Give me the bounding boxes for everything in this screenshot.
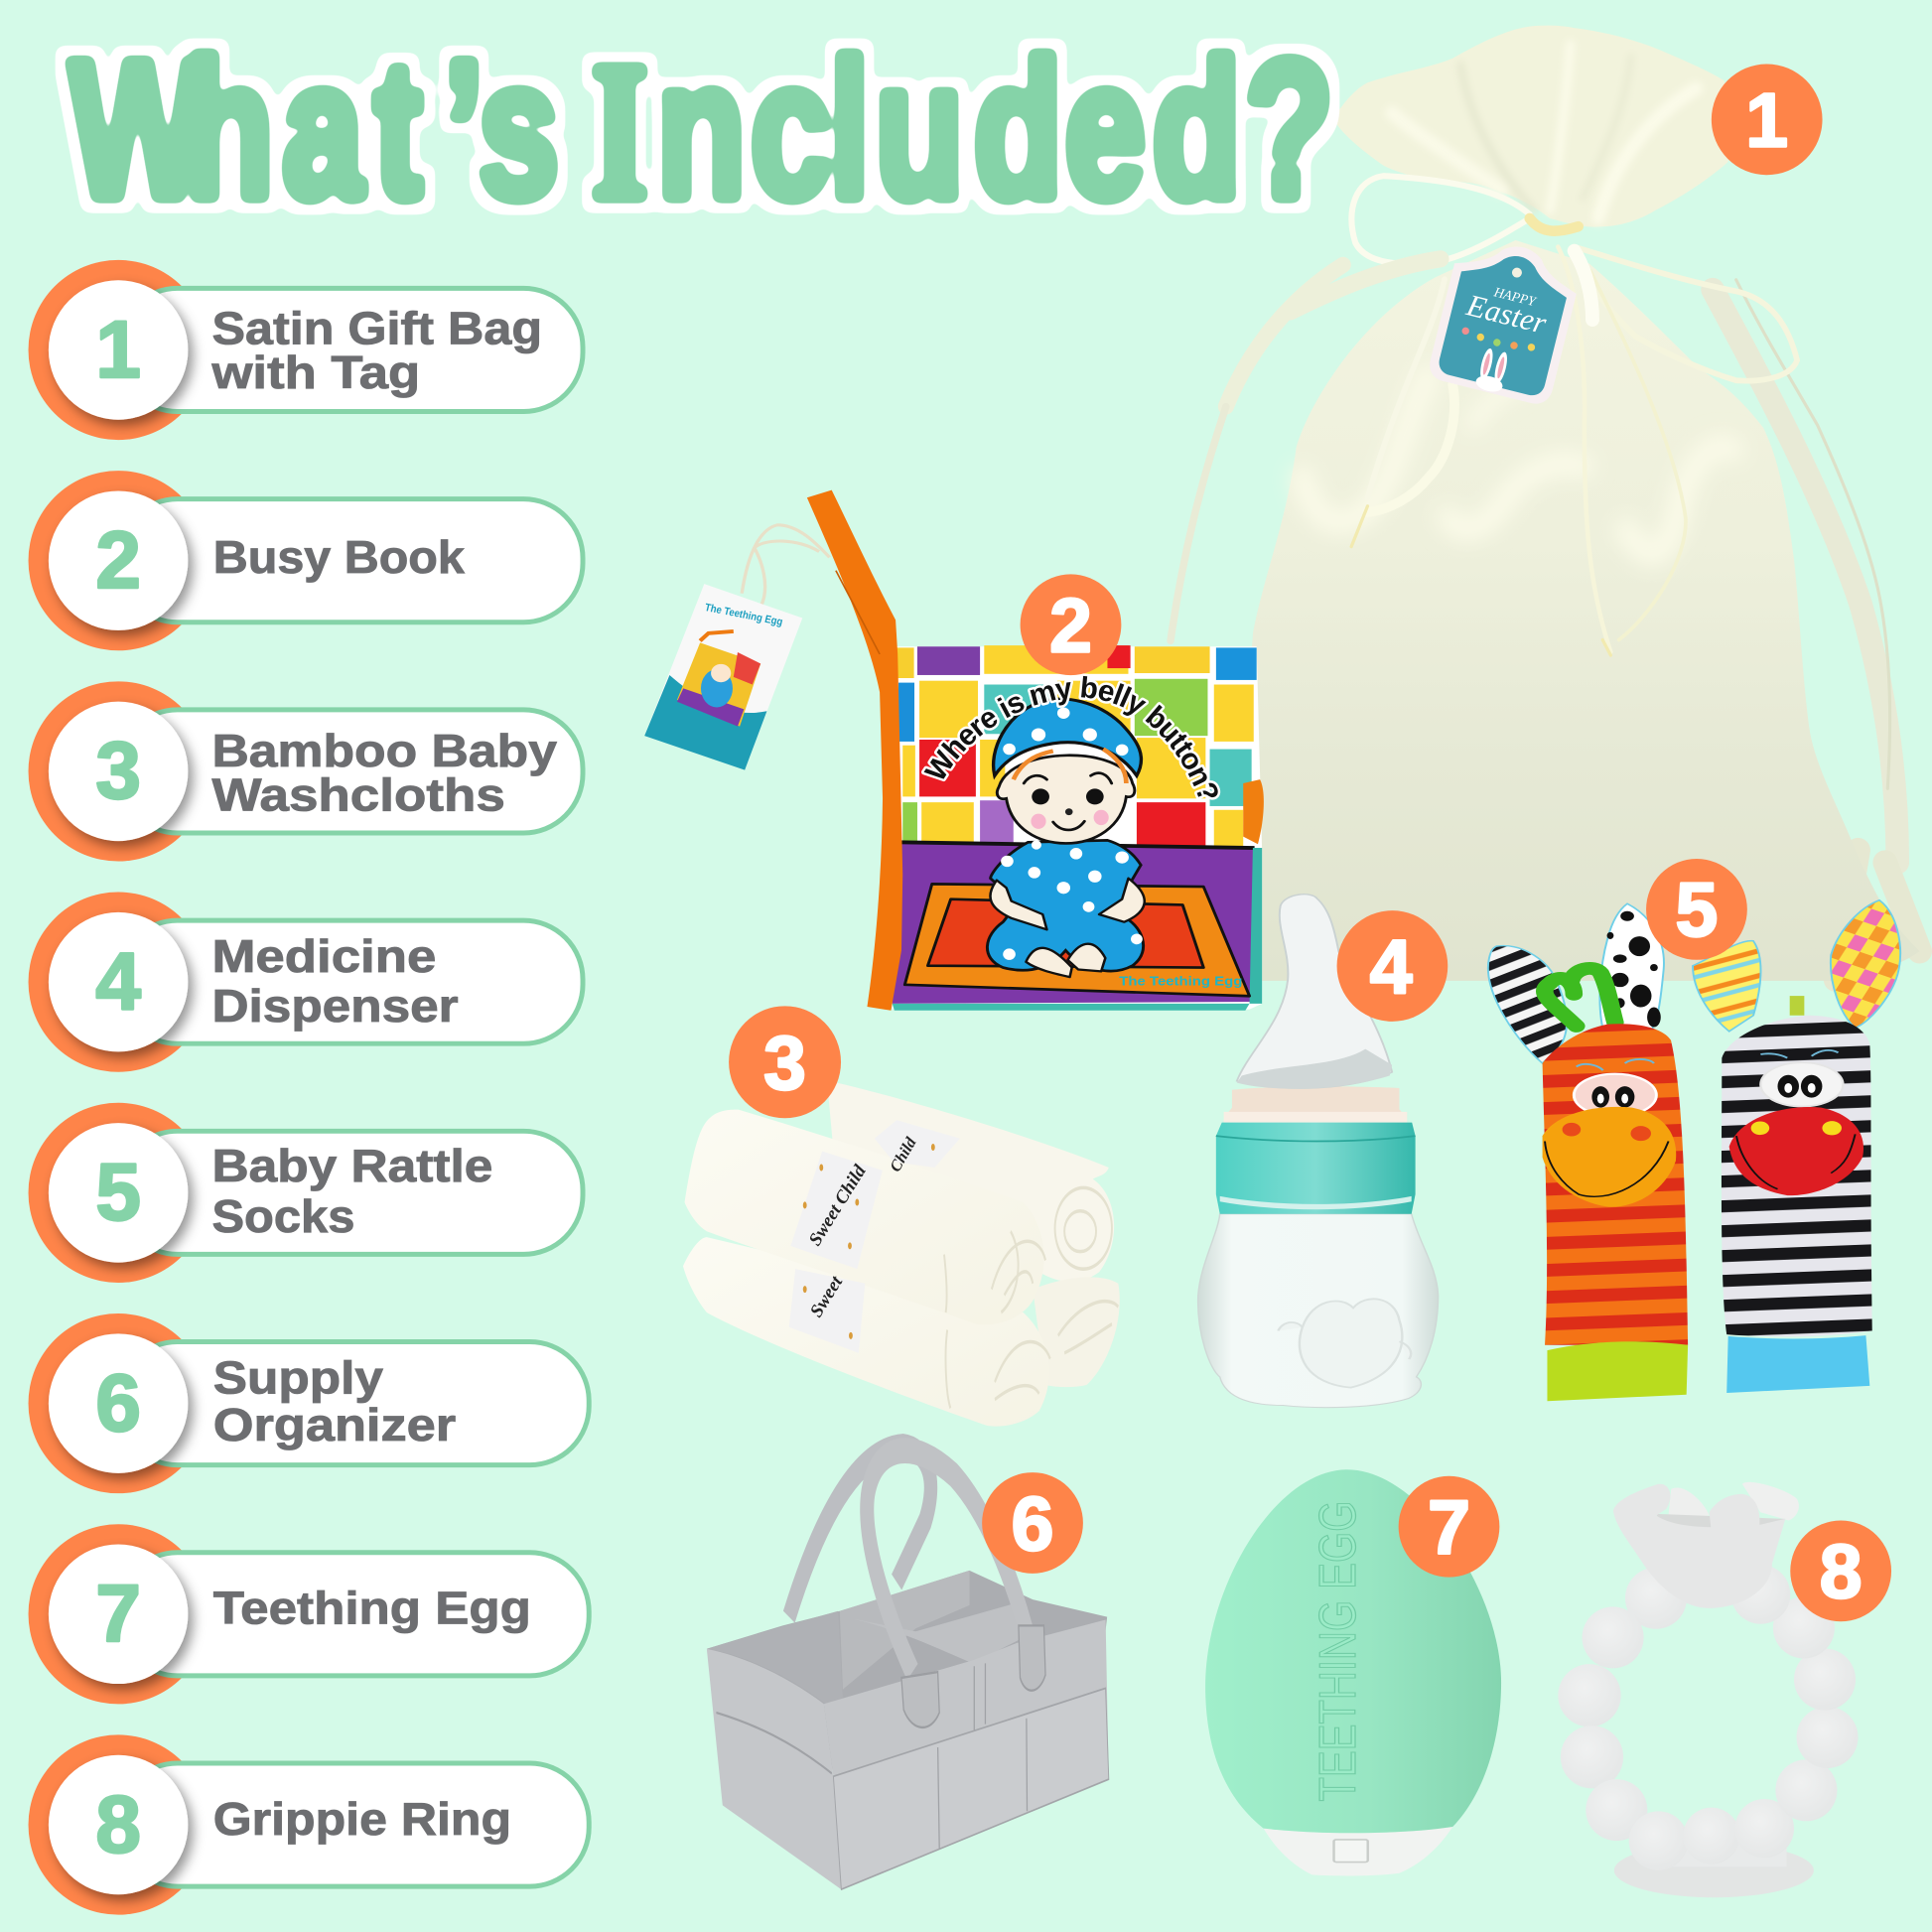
bag satin highlights	[1303, 376, 1732, 554]
number badge 1: 1	[1745, 78, 1788, 164]
book spine tab	[1243, 779, 1264, 844]
number badge 5	[1646, 859, 1747, 960]
list item 7	[29, 1524, 589, 1704]
list item 1: Satin Gift Bag	[211, 302, 542, 353]
front handle	[867, 1450, 1027, 1672]
list item 7: Teething Egg	[213, 1583, 531, 1634]
title: I	[592, 21, 648, 240]
number badge 4	[1337, 910, 1448, 1022]
list item 6: Organizer	[213, 1399, 456, 1450]
number badge 8: 8	[1820, 1530, 1863, 1615]
band label upper: Sweet Child	[805, 1161, 871, 1250]
number badge 7: 7	[1428, 1485, 1470, 1571]
gift tag	[1427, 232, 1585, 407]
list item 4	[29, 893, 583, 1072]
list item 2: Busy Book	[213, 531, 465, 583]
bag ribbons behind	[1171, 265, 1920, 980]
title: W	[69, 20, 207, 240]
number badge 5: 5	[1676, 868, 1718, 953]
list item 1: 1	[95, 305, 141, 395]
baby cap	[994, 699, 1141, 775]
list item 5	[29, 1103, 583, 1283]
bag zoomed-detail layer	[1291, 26, 1797, 655]
list item 7: 7	[95, 1569, 141, 1659]
teal ring	[1216, 1123, 1416, 1214]
baby arms and feet	[990, 879, 1145, 977]
list item 6: 6	[95, 1358, 141, 1449]
orange sock	[1543, 1024, 1688, 1345]
orange spine strap	[807, 490, 902, 1011]
hang tag	[644, 525, 830, 770]
handle tabs	[901, 1625, 1045, 1727]
hang tag brand: The Teething Egg	[704, 603, 784, 628]
organizer interior	[707, 1571, 1107, 1770]
organizer front face	[824, 1620, 1109, 1889]
ring stand	[1614, 1844, 1814, 1897]
tag bunting	[1460, 327, 1536, 355]
title: ncluded?	[657, 20, 1333, 240]
list item 8: 8	[95, 1779, 141, 1869]
zebra sock face	[1729, 1050, 1863, 1195]
number badge 3: 3	[763, 1021, 806, 1106]
egg lettering: TEETHING EGG	[1310, 1501, 1367, 1801]
page background	[893, 646, 1262, 1010]
organizer back wall	[840, 1571, 969, 1690]
list item 4: Medicine	[211, 930, 436, 982]
list item 2	[29, 471, 583, 650]
towel end spirals	[944, 1187, 1118, 1408]
tag text: HAPPY	[1491, 284, 1539, 310]
number badge 6: 6	[1012, 1481, 1053, 1567]
zebra sock	[1722, 1016, 1872, 1336]
sock antenna	[1545, 968, 1615, 1026]
orange sock cuff	[1547, 1341, 1688, 1401]
bottle embossed chick	[1278, 1299, 1411, 1388]
book title: Where is my belly button?	[921, 673, 1221, 800]
title	[69, 20, 1333, 240]
bag body	[1248, 240, 1920, 981]
orange sock face	[1543, 1059, 1676, 1207]
bottle body	[1198, 1214, 1439, 1408]
rug	[904, 884, 1250, 996]
organizer seams	[716, 1663, 1028, 1849]
list item 5: Baby Rattle	[211, 1140, 492, 1191]
number badge 1	[1712, 65, 1823, 175]
number badge 2: 2	[1049, 584, 1092, 669]
tag bunny	[1474, 347, 1511, 394]
baby face	[1024, 773, 1112, 830]
bag top sheen	[1392, 44, 1696, 218]
egg shell	[1205, 1469, 1501, 1875]
number badge 3	[729, 1006, 841, 1118]
list item 3	[29, 681, 583, 862]
ring crown	[1613, 1482, 1799, 1608]
product: medicine dispenser	[1198, 895, 1439, 1408]
bottle nipple	[1237, 895, 1392, 1088]
list item 4: 4	[95, 936, 141, 1027]
baby pattern dots	[1001, 840, 1143, 960]
towel rolls	[683, 1080, 1120, 1427]
list item 6	[29, 1313, 589, 1493]
organizer front pocket	[833, 1688, 1109, 1889]
number badge 7	[1399, 1476, 1499, 1578]
product: teething egg	[1205, 1469, 1501, 1875]
list item 2: 2	[95, 515, 141, 606]
product: busy book	[644, 490, 1264, 1011]
purple floor	[893, 842, 1255, 1004]
number badge 2	[1021, 574, 1121, 675]
list item 1: with Tag	[210, 346, 420, 398]
baby cap dots	[1003, 707, 1128, 756]
product: bamboo washcloths	[683, 1080, 1120, 1427]
quilt squares	[897, 645, 1257, 846]
band label back: Child	[887, 1134, 920, 1174]
number badge 6	[982, 1472, 1083, 1574]
list item 3: Bamboo Baby	[211, 725, 557, 776]
baby head	[997, 756, 1135, 843]
towel paper bands	[789, 1120, 960, 1353]
sock ears right	[1693, 900, 1900, 1032]
list item 5: 5	[95, 1148, 141, 1238]
sock ears left	[1488, 903, 1664, 1063]
ring stand neck	[1645, 1828, 1787, 1866]
organizer left face	[707, 1611, 843, 1704]
product: satin gift bag	[1171, 26, 1920, 981]
book logo: The Teething Egg	[1119, 974, 1242, 988]
list item 1	[29, 260, 583, 440]
number badge 8	[1790, 1520, 1891, 1621]
bag gathered top	[1333, 26, 1730, 227]
book illustration	[807, 490, 1264, 1011]
organizer dividers	[843, 1602, 1019, 1663]
bottle collar	[1224, 1086, 1407, 1122]
product: grippie ring	[1558, 1482, 1859, 1897]
list item 4: Dispenser	[211, 980, 459, 1032]
list item 3: 3	[95, 726, 141, 816]
back handle	[789, 1446, 930, 1617]
bag bow loops and tails	[1291, 176, 1797, 655]
list item 6: Supply	[213, 1352, 383, 1404]
product: baby rattle socks	[1488, 900, 1900, 1401]
title: hat’s	[185, 20, 559, 240]
baby hair	[1014, 750, 1126, 783]
list item 8	[29, 1734, 589, 1915]
gift tag: Easter	[1462, 287, 1551, 341]
list item 3: Washcloths	[211, 769, 505, 821]
ring beads	[1558, 1565, 1859, 1870]
baby body	[987, 840, 1144, 971]
number badge 4: 4	[1370, 924, 1413, 1010]
list item 8: Grippie Ring	[213, 1793, 511, 1845]
product: supply organizer	[707, 1446, 1109, 1889]
list item 5: Socks	[211, 1190, 354, 1242]
band label lower: Sweet	[806, 1272, 848, 1321]
zebra sock cuff	[1726, 1335, 1869, 1393]
